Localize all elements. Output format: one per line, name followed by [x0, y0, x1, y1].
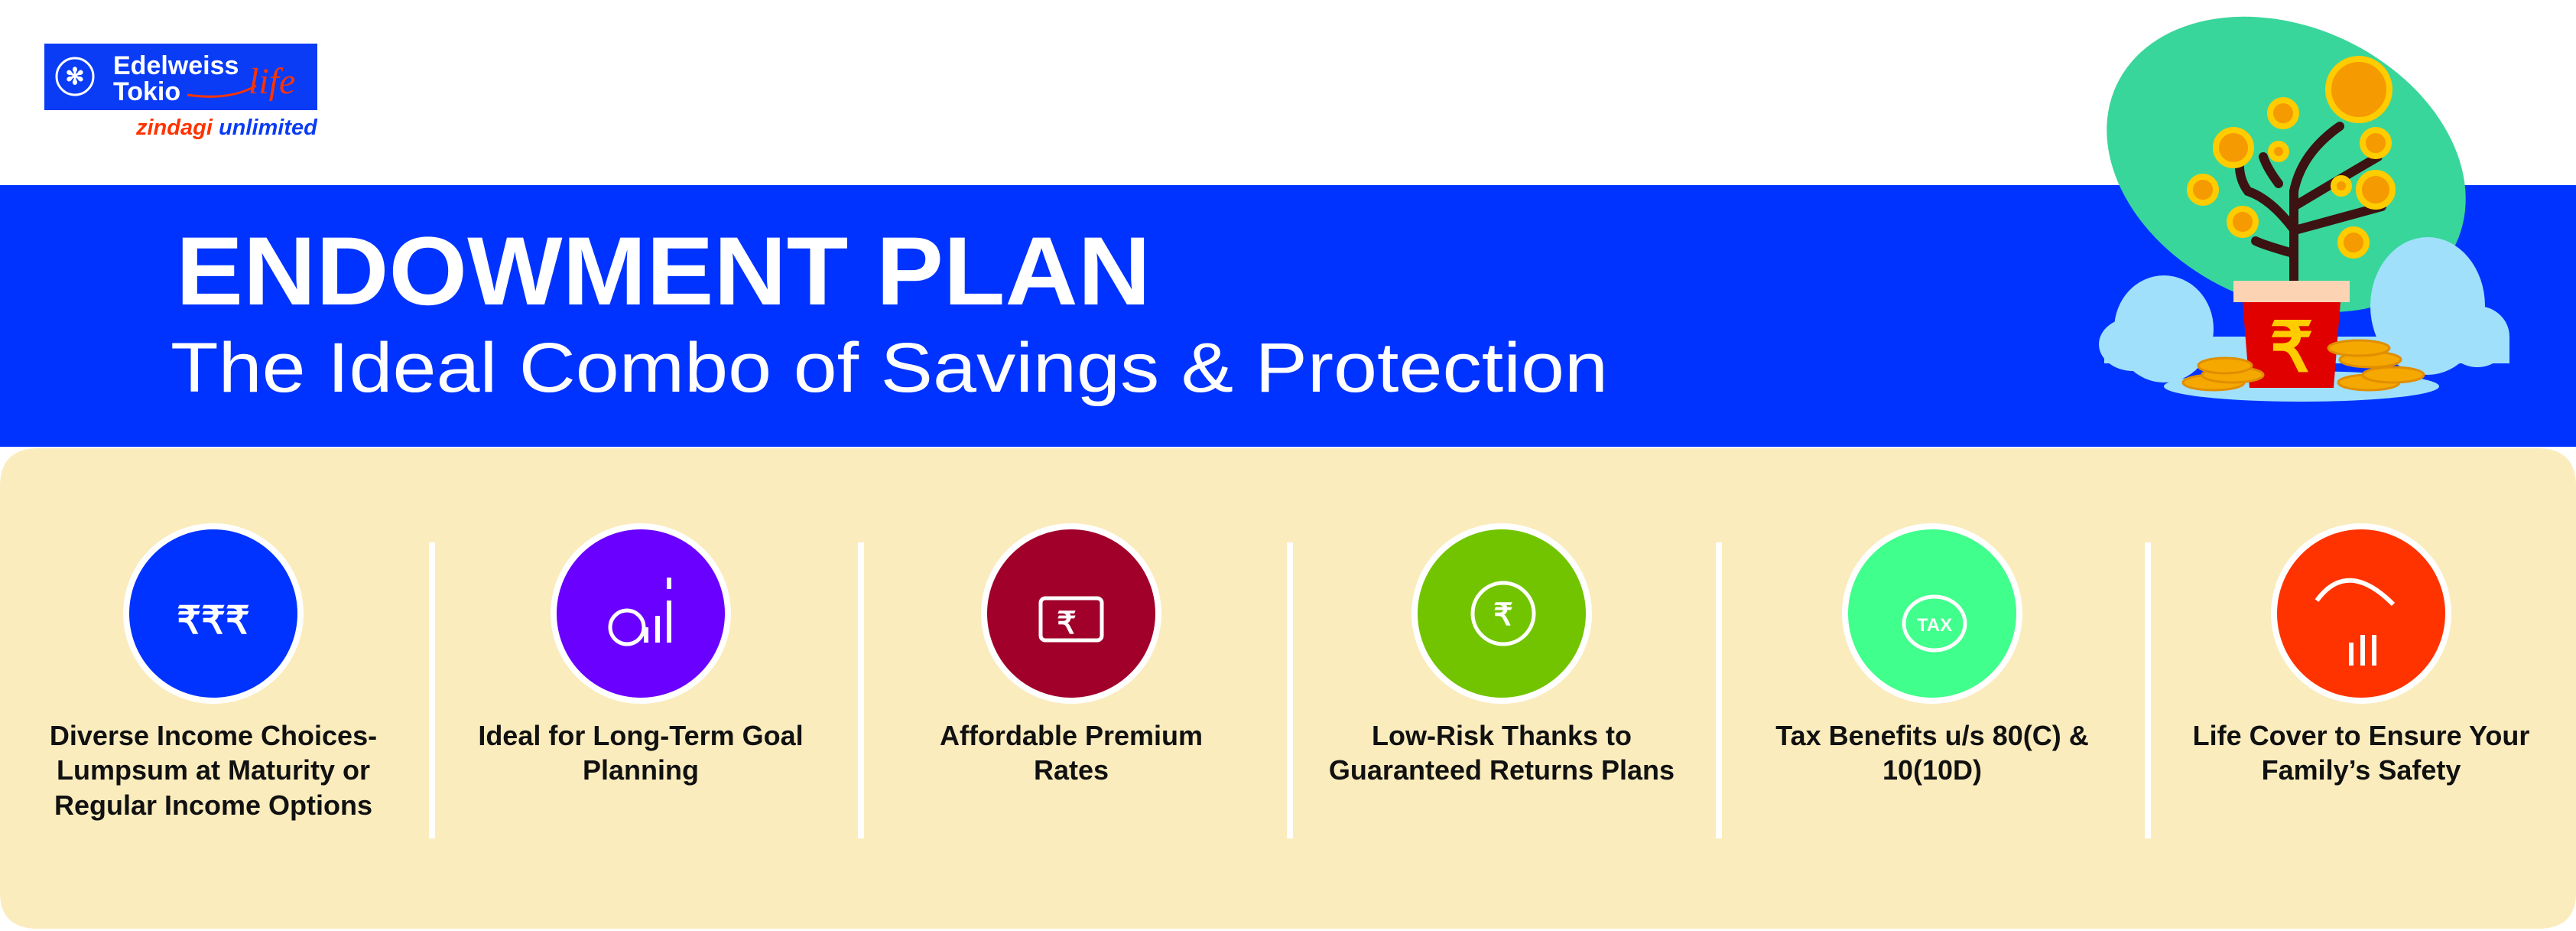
column 4: ₹: [1493, 598, 1513, 632]
column 5: 10(10D): [1882, 754, 1982, 786]
column 3: Rates: [1034, 754, 1109, 786]
column 5: Tax Benefits u/s 80(C) &: [1775, 720, 2089, 751]
illustration: money tree: [2058, 0, 2514, 402]
column 6: Life Cover to Ensure Your: [2193, 720, 2529, 751]
column 1: [50, 526, 377, 821]
logo: zindagi unlimited: [135, 116, 318, 140]
column 4: Low-Risk Thanks to: [1372, 720, 1632, 751]
column 1: ₹₹₹: [177, 599, 250, 642]
column 3: [940, 526, 1203, 786]
logo: life: [249, 61, 295, 102]
cream content panel: [0, 448, 2576, 929]
logo: Edelweiss: [113, 51, 239, 80]
column 1: Lumpsum at Maturity or: [57, 754, 370, 786]
column 2: Ideal for Long-Term Goal: [478, 720, 804, 751]
column 6: [2193, 526, 2529, 786]
column 5: [1775, 526, 2089, 786]
column 2: [478, 526, 804, 786]
column 2: Planning: [583, 754, 699, 786]
illustration: money tree: ₹: [2269, 310, 2314, 386]
subtitle: The Ideal Combo of Savings & Protection: [171, 329, 1608, 407]
column 6: Family’s Safety: [2262, 754, 2461, 786]
blue header band: [0, 185, 2576, 447]
logo: [44, 44, 318, 140]
column 5: TAX: [1917, 615, 1952, 636]
column 4: [1329, 526, 1675, 786]
logo: Tokio: [113, 77, 180, 106]
title: ENDOWMENT PLAN: [176, 216, 1151, 325]
logo: ✻: [65, 64, 85, 90]
column 1: Regular Income Options: [54, 789, 372, 821]
column 4: Guaranteed Returns Plans: [1329, 754, 1675, 786]
column 1: Diverse Income Choices-: [50, 720, 377, 751]
column 3: Affordable Premium: [940, 720, 1203, 751]
column 3: ₹: [1057, 607, 1077, 640]
